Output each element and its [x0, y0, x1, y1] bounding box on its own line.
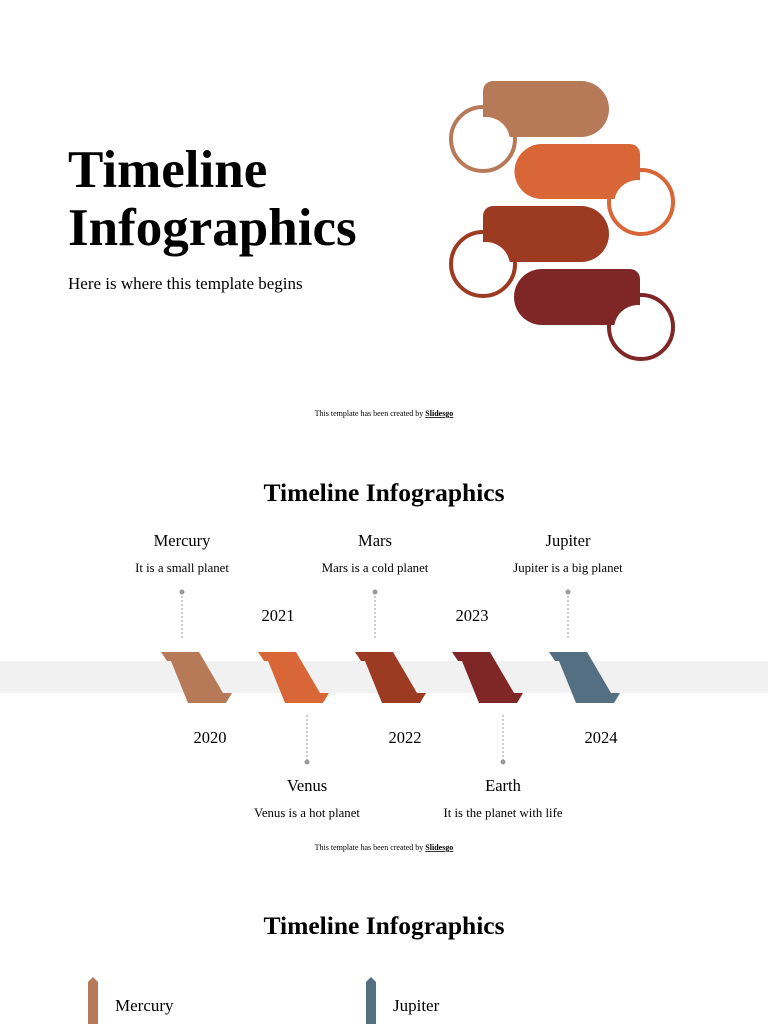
section 2 title: Timeline Infographics: [263, 478, 505, 507]
labels: 2022: [388, 728, 422, 747]
labels: Earth: [485, 776, 522, 795]
connectors: [180, 590, 570, 764]
labels: Venus is a hot planet: [254, 806, 360, 820]
labels: Venus: [287, 776, 327, 795]
footer credit 2: This template has been created by Slidesgo: [315, 843, 453, 852]
title: Infographics: [68, 199, 357, 257]
list item: Jupiter: Jupiter: [393, 996, 440, 1015]
pill 1: [451, 81, 609, 171]
pill 3: [451, 206, 609, 296]
title: Timeline: [68, 141, 267, 199]
subtitle: Here is where this template begins: [68, 274, 303, 293]
labels: Jupiter: [546, 531, 591, 550]
labels: Mercury: [154, 531, 211, 550]
timeline band: [0, 661, 768, 693]
pill 4: [514, 269, 673, 359]
list item: Jupiter: [366, 977, 440, 1024]
footer credit 1: This template has been created by Slidesgo: [315, 409, 453, 418]
labels: 2023: [456, 606, 488, 625]
title: [68, 141, 357, 257]
labels: It is a small planet: [135, 561, 229, 575]
labels: It is the planet with life: [443, 806, 563, 820]
decorative pills graphic: [451, 81, 673, 359]
labels: [135, 531, 623, 820]
labels: Mars is a cold planet: [322, 561, 429, 575]
section 3 title: Timeline Infographics: [263, 911, 505, 940]
list item: Mercury: Mercury: [115, 996, 174, 1015]
labels: 2024: [584, 728, 618, 747]
labels: Jupiter is a big planet: [513, 561, 623, 575]
pill 2: [514, 144, 673, 234]
labels: Mars: [358, 531, 392, 550]
labels: 2021: [262, 606, 294, 625]
markers: [161, 652, 620, 703]
labels: 2020: [194, 728, 226, 747]
list item: Mercury: [88, 977, 174, 1024]
